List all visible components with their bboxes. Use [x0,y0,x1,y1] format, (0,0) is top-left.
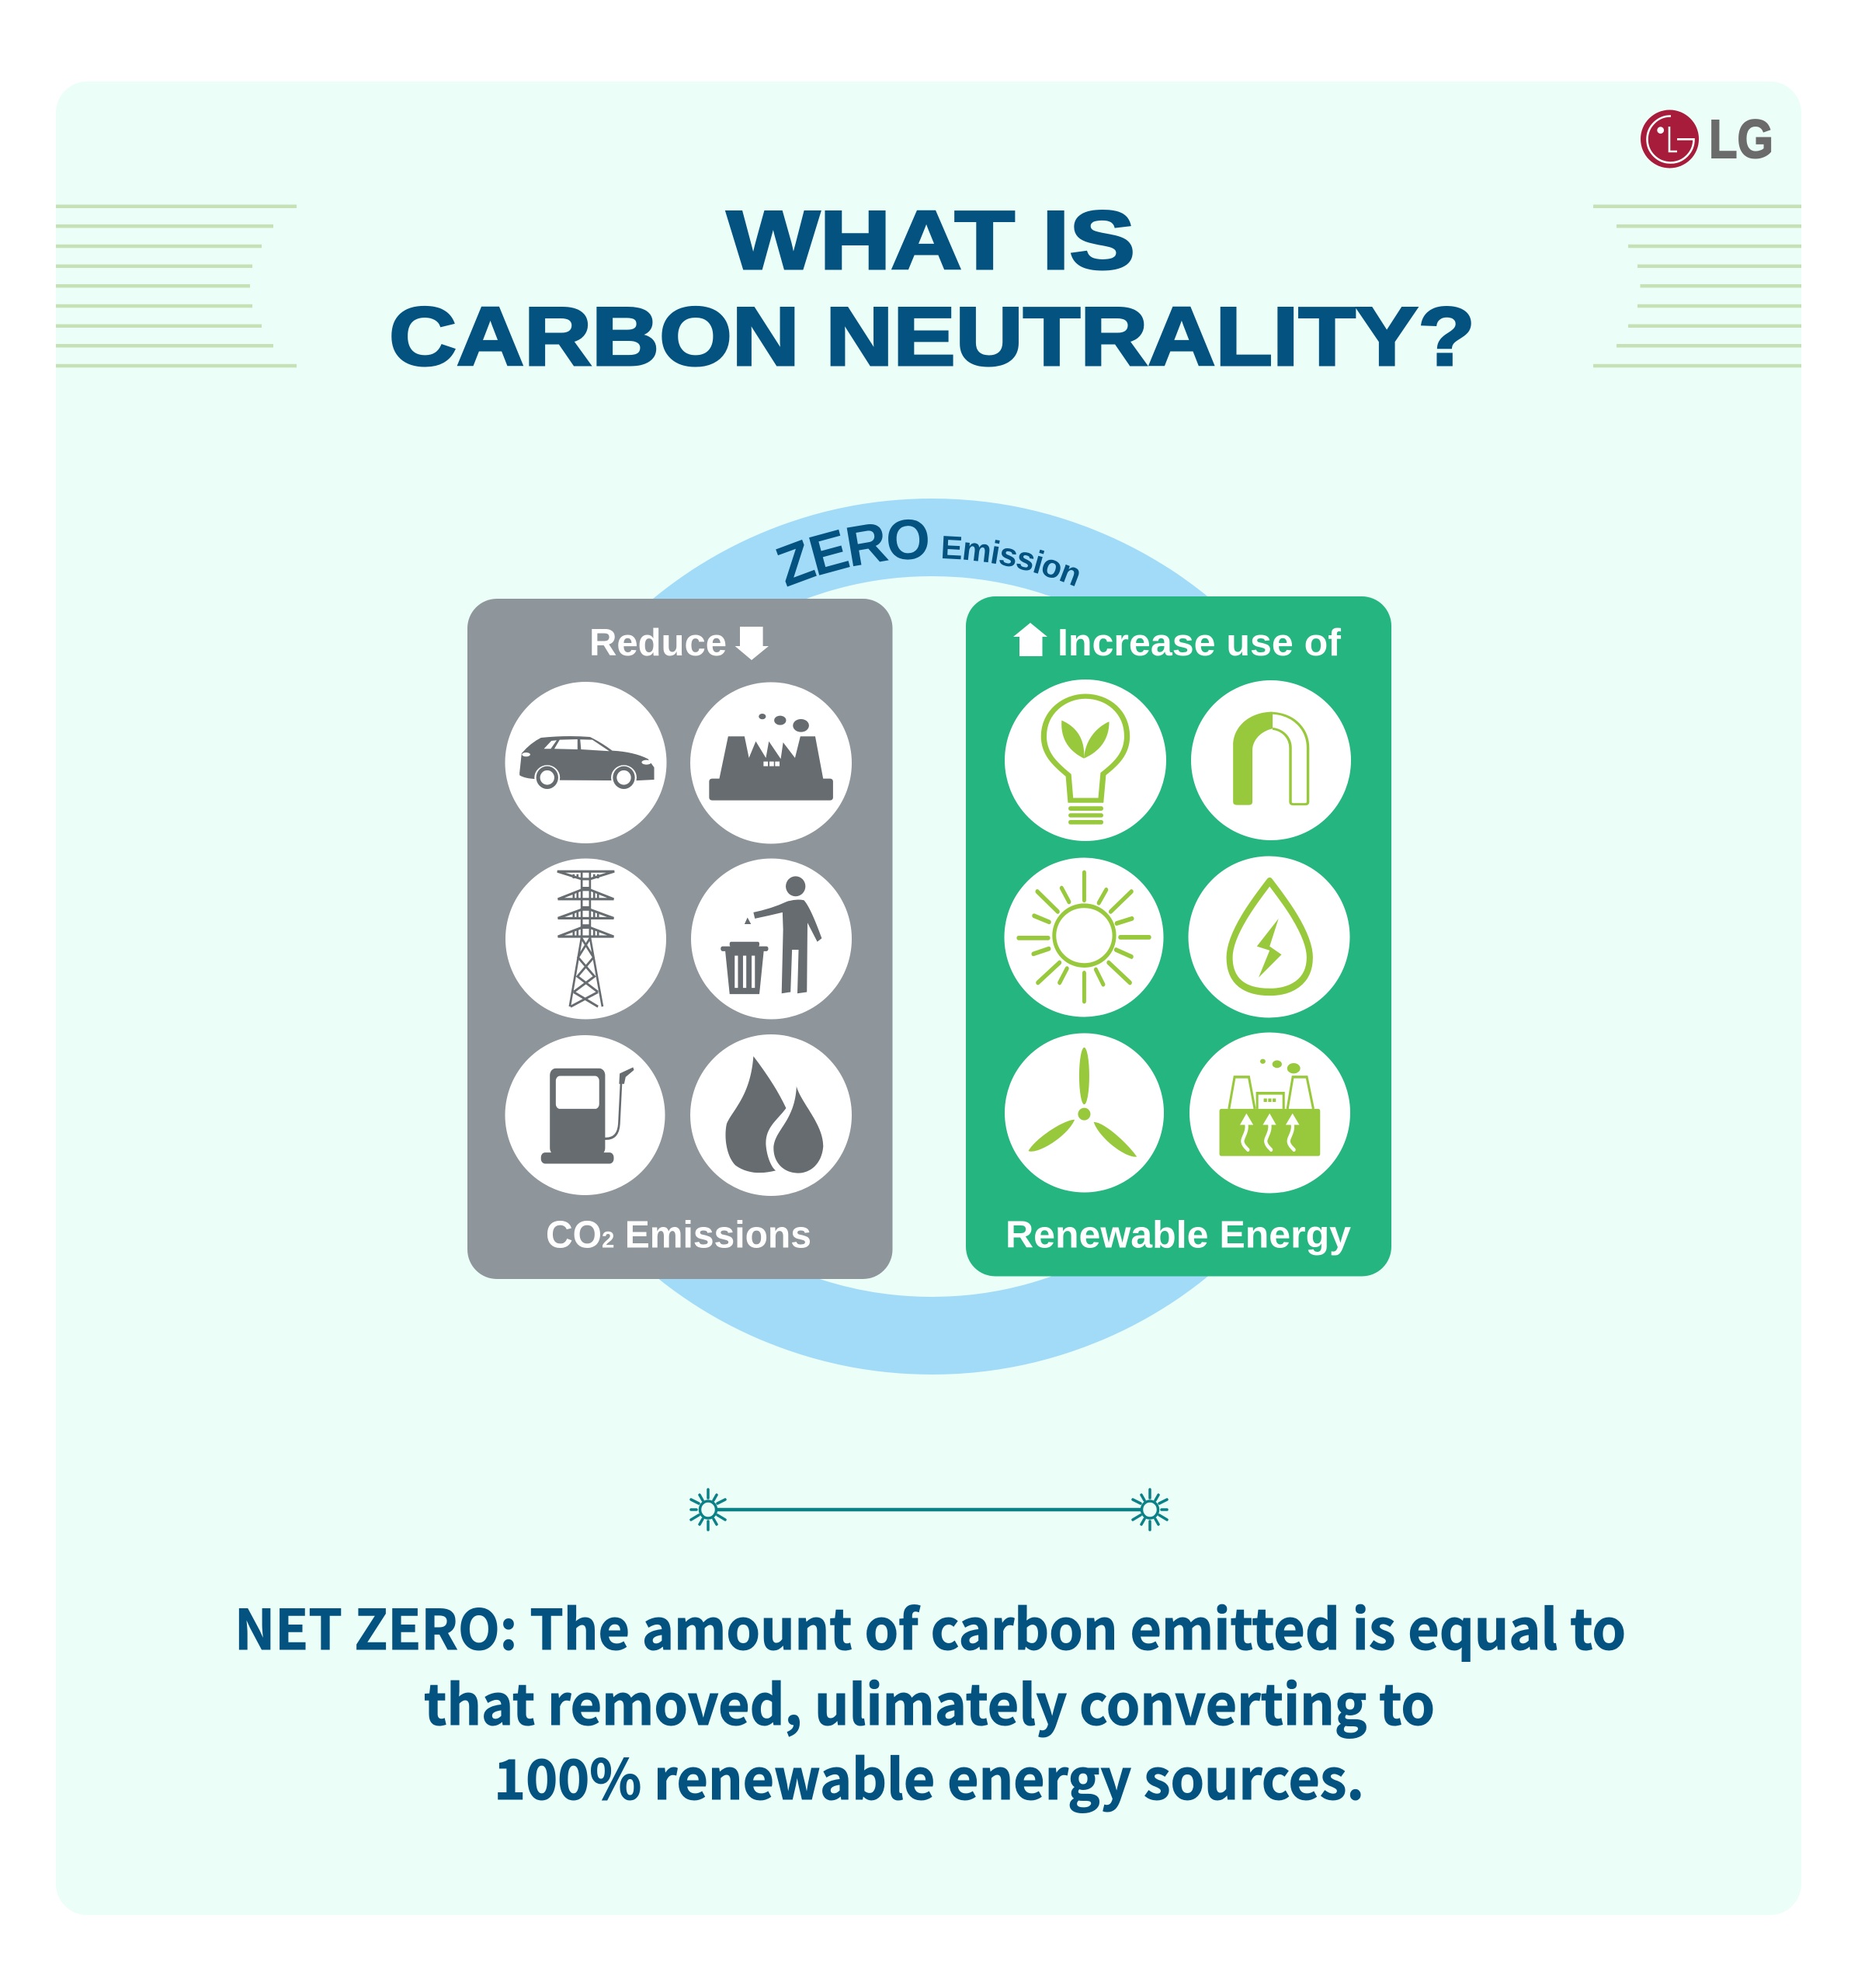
logo: LG [1641,109,1773,169]
text block: net zero definition: that removed, ulimately converting to [424,1662,1435,1741]
panel: increase renewable energy [966,596,1391,1277]
icon: fuel pump [505,1035,665,1195]
icon: factory [690,682,852,843]
text block: net zero definition [234,1587,1626,1816]
icon: wind turbine [1005,1033,1164,1193]
icon: eco light bulb [1005,679,1166,841]
icon: geothermal plant [1189,1033,1350,1193]
ring: zero emission loop [533,537,1331,1336]
icon: person disposing trash [691,859,852,1019]
icon: energy water drop [1188,856,1349,1017]
icon: car [505,682,666,843]
logo: LG: LG [1709,109,1773,169]
icon: up arrow [1013,623,1047,656]
title [389,193,1475,383]
icon: transmission tower [505,859,666,1019]
icon: down arrow [735,627,769,660]
heading: Increase use of: Increase use of [1057,622,1342,664]
icon: fossil fuel flames [690,1034,852,1196]
ring label: ZERO Emission: ZERO [776,519,928,587]
ring label: ZERO Emission: Emission [943,536,1079,586]
icon: hydro arch [1191,680,1351,840]
label: CO2 Emissions: CO2 Emissions [546,1215,811,1256]
label: Renewable Energy: Renewable Energy [1005,1215,1351,1256]
heading: Reduce: Reduce [589,622,727,664]
icon: sun [1005,857,1163,1017]
panel: reduce CO2 emissions [467,599,893,1279]
title: CARBON NEUTRALITY? [389,290,1475,383]
title: WHAT IS [727,193,1135,287]
divider with sun end caps [691,1489,1167,1530]
text block: net zero definition: 100% renewable energy sources. [494,1736,1364,1816]
text block: net zero definition: NET ZERO: The amount of carbon emitted is equal to [234,1587,1626,1666]
ring label: ZERO Emission [776,519,1079,587]
